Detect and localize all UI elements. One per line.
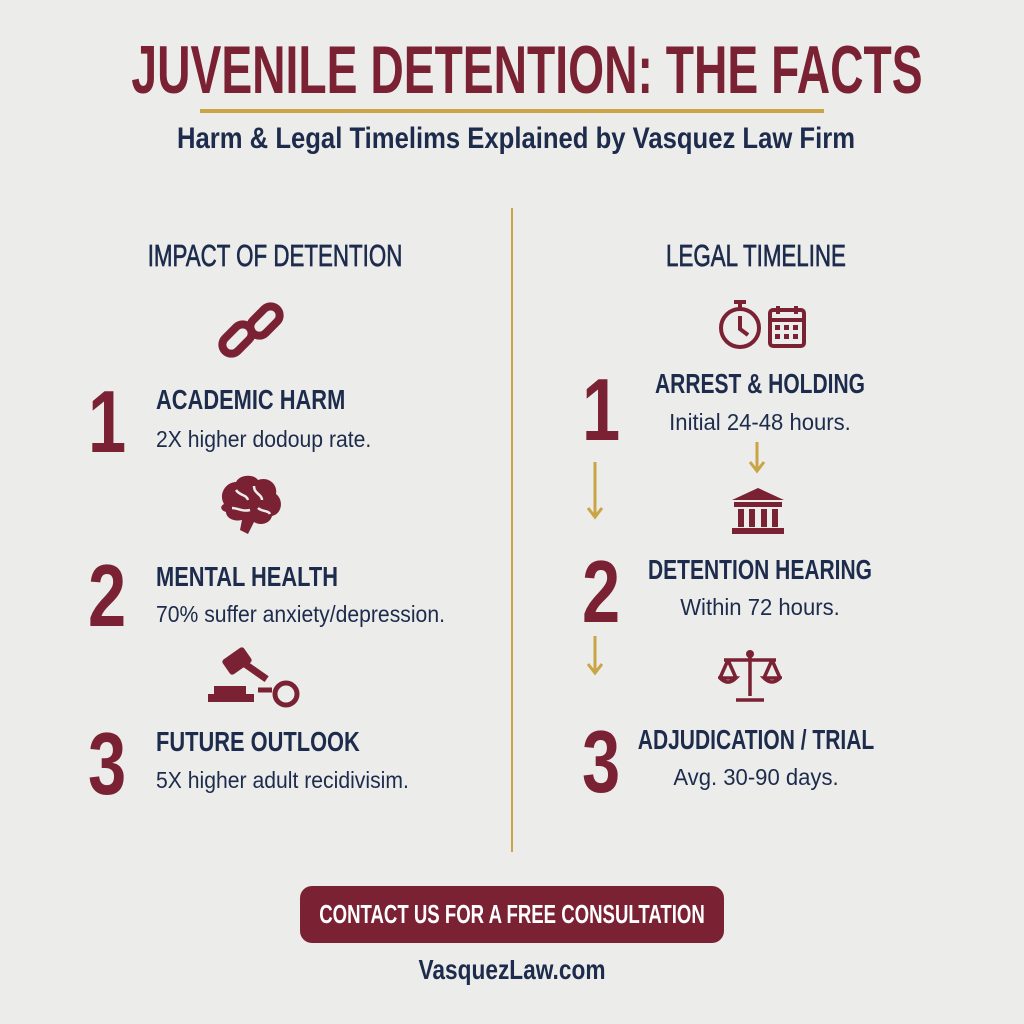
- item: arrest and holding: ARREST & HOLDING: [655, 368, 865, 399]
- item: academic harm: ACADEMIC HARM: [156, 384, 345, 415]
- item: adjudication: [638, 724, 874, 790]
- number 2: 2: [88, 546, 126, 645]
- icon: gavel and handcuffs: [208, 647, 300, 708]
- item: mental health: MENTAL HEALTH: [156, 561, 338, 592]
- title: JUVENILE DETENTION: THE FACTS: [131, 32, 923, 108]
- arrow: [586, 462, 604, 520]
- item: detention hearing: Within 72 hours.: [680, 594, 840, 620]
- gold underline: [200, 109, 824, 113]
- number 3: 3: [88, 714, 126, 813]
- item: academic harm: [156, 384, 371, 452]
- item: future outlook: [156, 726, 409, 793]
- panel: legal timeline: [582, 238, 874, 811]
- number 3: 3: [582, 712, 620, 811]
- icon: chain: [218, 302, 284, 358]
- item: mental health: [156, 561, 445, 627]
- item: future outlook: FUTURE OUTLOOK: [156, 726, 360, 757]
- vertical divider: [511, 208, 513, 852]
- item: academic harm: 2X higher dodoup rate.: [156, 426, 371, 452]
- item: adjudication: Avg. 30-90 days.: [673, 764, 839, 790]
- item: adjudication: ADJUDICATION / TRIAL: [638, 724, 874, 755]
- number 1: 1: [88, 372, 126, 471]
- button label: CONTACT US FOR A FREE CONSULTATION: [319, 899, 705, 929]
- icon: stopwatch and calendar: [719, 300, 806, 349]
- website url: VasquezLaw.com: [419, 954, 605, 985]
- subtitle: Harm & Legal Timelims Explained by Vasquez Law Firm: [177, 122, 855, 155]
- item: future outlook: 5X higher adult recidivisim.: [156, 767, 409, 793]
- item: mental health: 70% suffer anxiety/depression.: [156, 601, 445, 627]
- heading: impact: IMPACT OF DETENTION: [148, 238, 402, 273]
- icon: brain: [221, 476, 281, 534]
- button: contact: [300, 886, 724, 943]
- item: detention hearing: [648, 554, 872, 620]
- heading: legal timeline: LEGAL TIMELINE: [666, 238, 846, 273]
- arrow: [748, 442, 766, 474]
- arrow: [586, 636, 604, 676]
- number 2: 2: [582, 542, 620, 641]
- icon: scales: [718, 650, 782, 702]
- item: detention hearing: DETENTION HEARING: [648, 554, 872, 585]
- panel: impact of detention: [88, 238, 445, 813]
- item: arrest and holding: [655, 368, 865, 435]
- icon: courthouse: [732, 488, 784, 534]
- item: arrest and holding: Initial 24-48 hours.: [669, 409, 851, 435]
- number 1: 1: [582, 360, 620, 459]
